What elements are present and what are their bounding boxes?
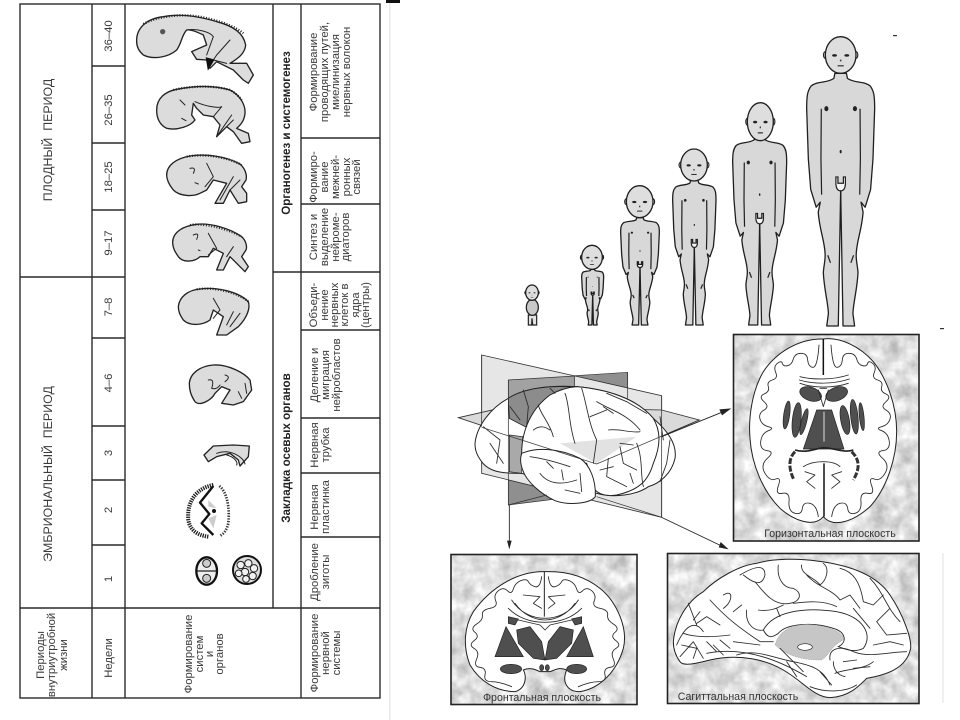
heading: embryonic period: ЭМБРИОНАЛЬНЫЙ ПЕРИОД bbox=[40, 386, 55, 562]
cell: neural plate: пластинка bbox=[320, 479, 332, 534]
figure: adult bbox=[807, 37, 875, 326]
row label: formation of systems and organs bbox=[183, 615, 226, 693]
row label: formation of systems and organs: и bbox=[204, 651, 216, 657]
cell: neuroblast division: нейробластов bbox=[331, 338, 343, 412]
cell: neurotransmitters bbox=[308, 208, 352, 266]
week numbers: 36–40 bbox=[103, 20, 115, 52]
arrow: to horizontal plane bbox=[662, 408, 731, 437]
growth series: human figures bbox=[525, 37, 875, 326]
row label: nervous system formation bbox=[309, 614, 343, 692]
row label: nervous system formation: Формирование bbox=[309, 614, 321, 692]
row label: periods of intrauterine life: внутриутробной bbox=[46, 613, 58, 697]
caption: Сагиттальная плоскость bbox=[678, 691, 799, 703]
cell: zygote cleavage: Дробление bbox=[309, 543, 321, 601]
fetus 26-35 weeks bbox=[157, 87, 250, 143]
cell: pathways and myelination: проводящих путей, bbox=[319, 22, 331, 122]
cell: zygote cleavage: зиготы bbox=[320, 555, 332, 589]
cell: pathways and myelination: нервных волокон bbox=[341, 27, 353, 117]
early embryo series lower table bbox=[188, 365, 261, 585]
caption: Фронтальная плоскость bbox=[483, 692, 601, 704]
week numbers: 9–17 bbox=[103, 230, 115, 256]
row label: periods of intrauterine life: жизни bbox=[58, 639, 70, 671]
week numbers: 7–8 bbox=[103, 298, 115, 316]
cell: nuclei formation: нение bbox=[319, 289, 331, 321]
row label: formation of systems and organs: систем bbox=[194, 636, 206, 672]
cell: neuroblast division: миграция bbox=[320, 350, 332, 400]
cell: nuclei formation: (центры) bbox=[360, 282, 372, 328]
figure: toddler bbox=[621, 186, 659, 325]
week numbers: 4–6 bbox=[103, 374, 115, 392]
brain: front hemisphere bbox=[522, 387, 659, 496]
row label: formation of systems and organs: органов bbox=[214, 633, 226, 675]
plane: sagittal light bbox=[482, 355, 662, 517]
week numbers: 2 bbox=[103, 507, 115, 513]
morula bbox=[233, 556, 261, 584]
fetus series upper table bbox=[137, 15, 253, 335]
cell: neurotransmitters: нейроме- bbox=[330, 212, 342, 262]
panel background bbox=[451, 554, 637, 704]
cell: pathways and myelination: Формирование bbox=[308, 33, 320, 111]
table grid bbox=[20, 4, 380, 698]
brain section bbox=[750, 339, 897, 523]
week numbers: 3 bbox=[103, 450, 115, 456]
shaded rear cortex behind plane bbox=[508, 387, 573, 428]
panel background bbox=[668, 554, 919, 704]
caption: Горизонтальная плоскость bbox=[764, 528, 896, 540]
row label: nervous system formation: системы bbox=[331, 631, 343, 675]
cell: nuclei formation: клеток в bbox=[339, 284, 351, 326]
panel: sagittal plane section bbox=[668, 554, 919, 704]
frame bbox=[668, 554, 919, 704]
cell: nuclei formation: ядра bbox=[350, 292, 362, 318]
embryo 2 weeks: neural plate bbox=[188, 485, 229, 537]
cell: interneuron links: межней- bbox=[330, 155, 342, 199]
fetus 7-8 weeks bbox=[178, 288, 249, 335]
heading: axial organs: Закладка осевых органов bbox=[280, 373, 293, 523]
panel background bbox=[734, 334, 919, 541]
fetus 36-40 weeks bbox=[137, 15, 253, 83]
row label: weeks: Недели bbox=[103, 638, 115, 678]
brain: rear hemisphere bbox=[475, 386, 675, 496]
row label: periods of intrauterine life bbox=[35, 613, 70, 697]
cell: interneuron links bbox=[308, 151, 363, 203]
cell: nuclei formation bbox=[308, 282, 372, 328]
brain: lower dark plane wedge bbox=[509, 435, 523, 473]
figure: child bbox=[673, 149, 716, 325]
embryo 4-6 weeks bbox=[189, 365, 252, 405]
scan edge marks bbox=[386, 0, 944, 720]
cell: neural plate bbox=[309, 479, 332, 534]
row label: nervous system formation: нервной bbox=[320, 631, 332, 675]
brain sulci bbox=[483, 388, 670, 493]
cell: interneuron links: вание bbox=[319, 162, 331, 192]
heading: organogenesis: Органогенез и системогенез bbox=[280, 51, 293, 215]
cell: pathways and myelination bbox=[308, 22, 353, 122]
row label: formation of systems and organs: Формирование bbox=[183, 615, 195, 693]
week numbers: 18–25 bbox=[103, 161, 115, 193]
heading: fetal period: ПЛОДНЫЙ ПЕРИОД bbox=[40, 78, 55, 201]
cell: interneuron links: Формиро- bbox=[308, 151, 320, 203]
cell: nuclei formation: Объеди- bbox=[308, 282, 320, 327]
plane lines over brain bbox=[482, 355, 699, 517]
cell: neural tube bbox=[309, 422, 332, 468]
cell: neuroblast division bbox=[309, 338, 343, 412]
frame bbox=[451, 554, 637, 704]
arrow: to sagittal plane bbox=[662, 517, 729, 549]
row label: periods of intrauterine life: Периоды bbox=[35, 631, 47, 679]
plane band across brain bbox=[560, 437, 637, 463]
week numbers bbox=[103, 20, 115, 582]
panel: prenatal development table bbox=[20, 4, 380, 698]
plane: frontal dark bbox=[508, 372, 628, 505]
cell: zygote cleavage bbox=[309, 543, 332, 601]
week numbers: 26–35 bbox=[103, 94, 115, 126]
plane: horizontal bbox=[458, 407, 699, 464]
cell: neural tube: трубка bbox=[320, 427, 332, 463]
panel: horizontal plane section bbox=[734, 334, 919, 541]
brain section bbox=[673, 559, 911, 698]
plane: frontal overlap bbox=[508, 376, 574, 437]
brain with three section planes bbox=[458, 355, 731, 549]
embryo 3 weeks bbox=[204, 445, 249, 466]
brain section bbox=[465, 572, 624, 692]
cell: neural tube: Нервная bbox=[309, 422, 321, 468]
figure: fetus/newborn tiny bbox=[525, 285, 539, 325]
brain: temporal lobe bbox=[521, 449, 595, 504]
cell: neural plate: Нервная bbox=[309, 484, 321, 530]
cell: pathways and myelination: миелинизация bbox=[330, 34, 342, 110]
cell: neurotransmitters: диаторов bbox=[340, 213, 352, 261]
cell: neuroblast division: Деление и bbox=[309, 348, 321, 402]
zygote: two cells bbox=[196, 557, 217, 585]
figure: teenager bbox=[733, 103, 787, 325]
cell: nuclei formation: нервных bbox=[329, 282, 341, 327]
arrow: to frontal plane bbox=[507, 505, 512, 549]
week numbers: 1 bbox=[103, 576, 115, 582]
cell: neurotransmitters: выделение bbox=[319, 208, 331, 266]
frame bbox=[734, 334, 919, 541]
cell: interneuron links: связей bbox=[351, 159, 363, 195]
figure: infant bbox=[580, 245, 604, 325]
cell: interneuron links: ронных bbox=[341, 157, 353, 196]
cell: neurotransmitters: Синтез и bbox=[308, 214, 320, 260]
fetus 18-25 weeks bbox=[167, 155, 247, 203]
panel: frontal plane section bbox=[451, 554, 637, 704]
fetus 9-17 weeks bbox=[173, 224, 248, 272]
